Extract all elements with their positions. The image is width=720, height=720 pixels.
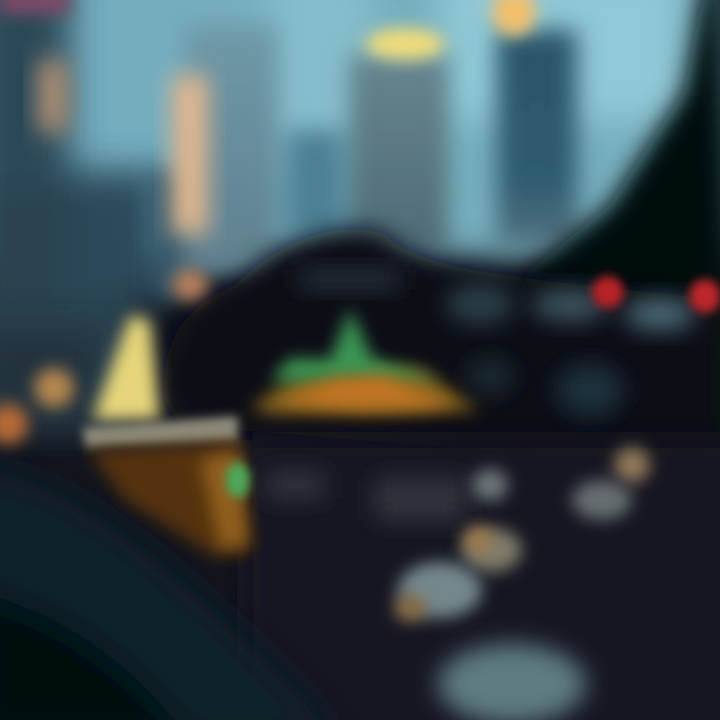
light: orange tower top bbox=[492, 0, 536, 36]
coins and pieces on the table bbox=[394, 447, 650, 720]
left buildings bbox=[0, 0, 160, 420]
pale foreground object bbox=[438, 644, 586, 720]
dial bbox=[466, 358, 514, 394]
light: magenta corner bbox=[0, 0, 70, 14]
light: yellow tower top bbox=[365, 28, 445, 60]
warm window lights bbox=[0, 0, 536, 444]
lower dark surface bbox=[245, 440, 720, 720]
light: tall peach window bbox=[172, 75, 208, 235]
chart base glow bbox=[250, 368, 480, 414]
coin: gold accent bbox=[464, 527, 492, 553]
right dark silhouette bbox=[440, 0, 720, 460]
central dark silhouette bbox=[164, 229, 720, 470]
panel glow bbox=[532, 289, 608, 321]
light: left orange spot bbox=[34, 368, 74, 408]
glass: cup of amber drink bbox=[82, 416, 250, 556]
green marker bbox=[226, 462, 250, 498]
coin pile: lower bbox=[398, 562, 482, 618]
cup body bbox=[88, 442, 250, 556]
dial bbox=[556, 364, 624, 416]
chart orange fill bbox=[275, 375, 455, 410]
coin pile: right bbox=[572, 480, 632, 520]
chart green peaks bbox=[270, 308, 440, 382]
light: left upper window bbox=[38, 60, 68, 132]
light: edge orange spot bbox=[0, 404, 28, 444]
red indicator bbox=[592, 276, 624, 308]
coin pile: top right bbox=[614, 447, 650, 483]
light: small orange lamp bbox=[172, 269, 208, 301]
label smudge bbox=[300, 268, 400, 290]
sky bbox=[0, 0, 720, 260]
red indicator bbox=[689, 279, 720, 313]
skyline towers bbox=[150, 25, 577, 300]
chart: green and orange mountain bbox=[250, 308, 480, 414]
coin pile: centre top bbox=[472, 469, 508, 501]
panel glow bbox=[446, 284, 514, 324]
coin: gold accent lower bbox=[394, 594, 426, 622]
foreground bottom-left curve bbox=[0, 470, 340, 720]
panel glow bbox=[624, 298, 696, 330]
dashboard: blurred gauges at right bbox=[300, 268, 720, 416]
cup glow bbox=[200, 450, 248, 548]
table text smudges bbox=[265, 472, 465, 520]
lower-left haze bbox=[0, 330, 100, 430]
coin pile: centre bbox=[462, 528, 522, 572]
yellow cone lamp bbox=[92, 315, 160, 420]
cup rim bbox=[82, 416, 238, 448]
